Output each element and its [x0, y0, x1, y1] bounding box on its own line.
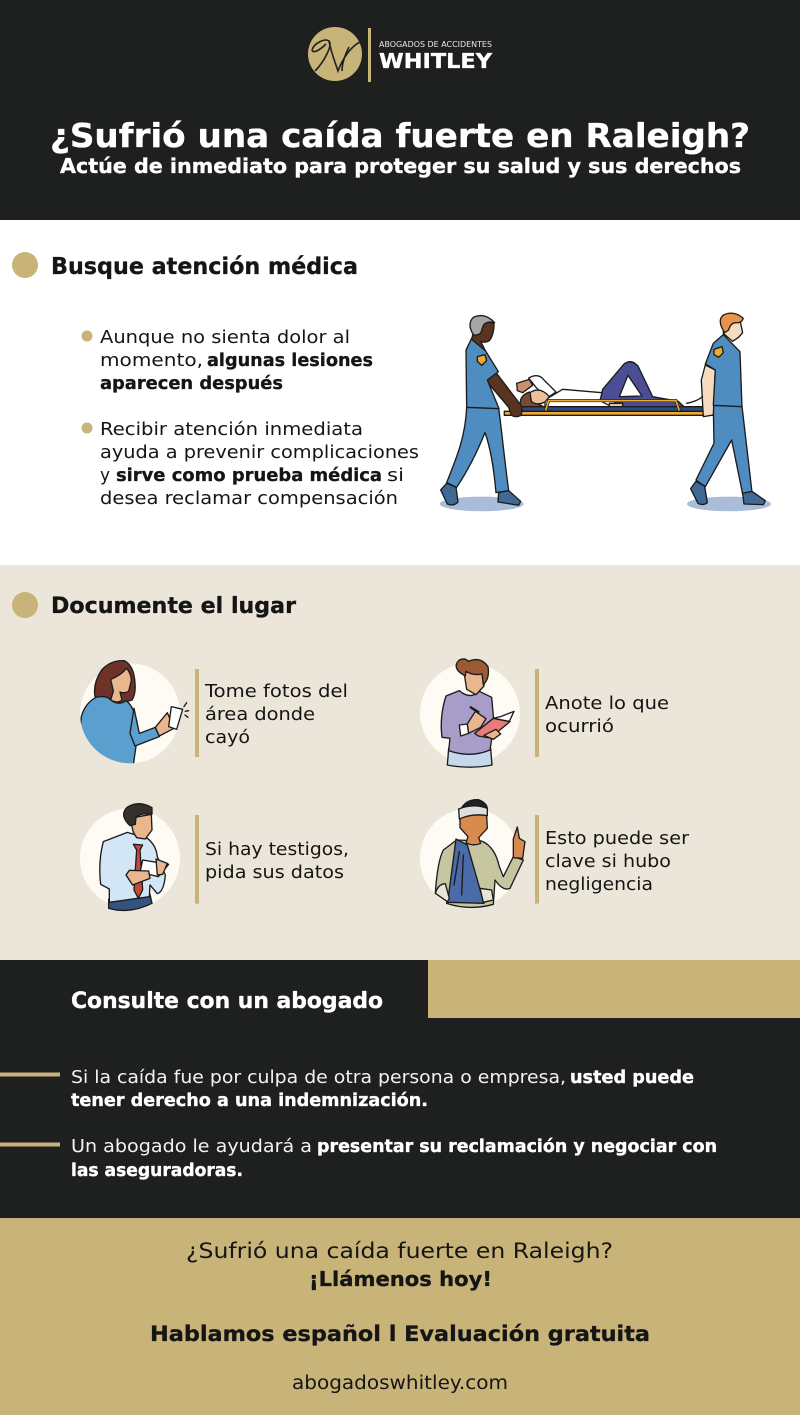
heading: Documente el lugar	[51, 594, 296, 619]
section marker	[12, 252, 38, 278]
subtitle: Actúe de inmediato para proteger su salud y sus derechos	[60, 154, 741, 178]
cta call: ¡Llámenos hoy!	[309, 1267, 492, 1291]
bullet text 2: ayuda a prevenir complicaciones	[100, 442, 419, 463]
right medic	[696, 405, 752, 494]
text: testigos	[205, 839, 349, 883]
paragraph 2: presentar su reclamación y negociar con	[317, 1137, 717, 1157]
heading: Busque atención médica	[51, 254, 358, 280]
divider bar	[535, 815, 539, 904]
icon: woman taking photo	[77, 661, 199, 765]
icon: injured man pointing	[420, 800, 539, 908]
bullet text 2: si	[387, 465, 404, 486]
cta question: ¿Sufrió una caída fuerte en Raleigh?	[186, 1239, 613, 1263]
text: tome fotos: cayó	[205, 727, 250, 748]
website: abogadoswhitley.com	[292, 1373, 508, 1394]
panel: consulte con un abogado	[0, 960, 800, 1218]
bullet text 2: desea reclamar compensación	[100, 488, 398, 509]
icon: woman writing notes	[420, 659, 539, 767]
stretcher	[522, 407, 703, 411]
paragraph 1: usted puede	[570, 1068, 694, 1088]
paragraph 2	[0, 1137, 717, 1181]
bullet text 1: Aunque no sienta dolor al	[100, 327, 350, 348]
bullet text 1: aparecen después	[100, 373, 283, 394]
divider bar	[195, 669, 199, 757]
heading: Consulte con un abogado	[71, 989, 383, 1014]
gold tab	[428, 960, 800, 1018]
paragraph 1	[0, 1068, 694, 1111]
text: negligencia: negligencia	[545, 874, 653, 895]
logo: ABOGADOS DE ACCIDENTES	[379, 40, 492, 49]
bullet text 1: algunas lesiones	[207, 350, 373, 371]
divider bar	[535, 669, 539, 757]
paragraph 2: Un abogado le ayudará a	[71, 1137, 312, 1157]
bullet text 1: momento,	[100, 350, 203, 371]
logo	[308, 27, 493, 82]
text: tome fotos	[204, 681, 348, 748]
bullet text 2	[82, 419, 419, 509]
title: ¿Sufrió una caída fuerte en Raleigh?	[50, 116, 750, 155]
text: anote	[545, 693, 669, 737]
text: anote: ocurrió	[545, 716, 614, 737]
panel: documente el lugar	[0, 565, 800, 960]
bullet text 2: sirve como prueba médica	[116, 465, 382, 486]
patient torso	[545, 389, 612, 407]
paragraph 1: tener derecho a una indemnización.	[71, 1091, 428, 1111]
text: anote: Anote lo que	[545, 693, 669, 714]
paragraph 2: las aseguradoras.	[71, 1161, 243, 1181]
text: tome fotos: área donde	[205, 704, 315, 725]
bullet text 2: Recibir atención inmediata	[100, 419, 363, 440]
icon: man taking witness details	[80, 804, 199, 910]
text: negligencia: clave si hubo	[545, 851, 671, 872]
logo: WHITLEY	[379, 49, 493, 73]
panel: call to action	[0, 1218, 800, 1415]
text: testigos: Si hay testigos,	[205, 839, 349, 860]
left medic	[447, 407, 509, 493]
panel: header	[0, 0, 800, 220]
section marker	[12, 592, 38, 618]
text: tome fotos: Tome fotos del	[204, 681, 348, 702]
text: negligencia: Esto puede ser	[545, 828, 690, 849]
bullet text 1	[82, 327, 373, 394]
illustration: paramedics carrying stretcher	[440, 313, 771, 511]
text: testigos: pida sus datos	[205, 862, 344, 883]
text: negligencia	[545, 828, 690, 895]
bullet text 2: y	[100, 465, 110, 486]
divider bar	[195, 815, 199, 904]
panel: busque atención médica	[0, 220, 800, 565]
patient legs	[600, 362, 684, 407]
cta details: Hablamos español l Evaluación gratuita	[150, 1322, 650, 1346]
paragraph 1: Si la caída fue por culpa de otra persona o empresa,	[71, 1068, 566, 1088]
